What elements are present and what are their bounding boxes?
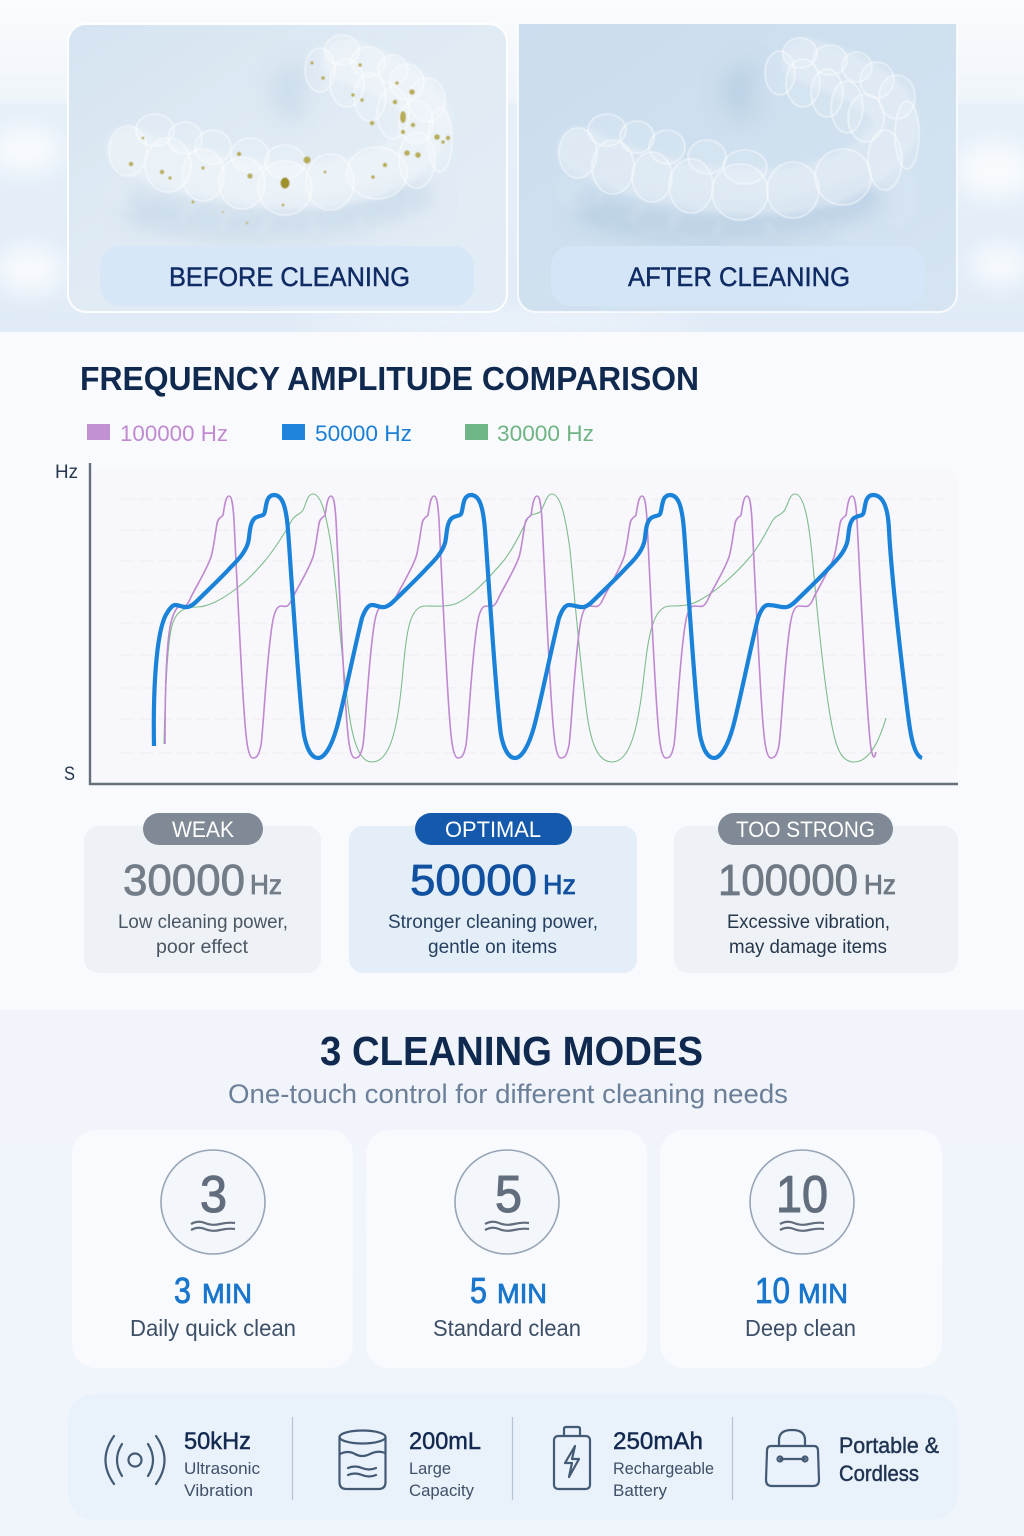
description: optimal: gentle on items [428,937,557,958]
label: 3 min [174,1270,252,1311]
series: 30000 Hz [164,494,886,762]
label: before cleaning: BEFORE CLEANING [169,262,410,292]
spec: 50kHz ultrasonic vibration: Vibration [184,1481,253,1500]
description: standard clean: Standard clean [433,1315,581,1341]
badge: weak [143,813,263,845]
spec: 200mL large capacity: Capacity [409,1481,474,1500]
line chart: frequency waves [55,462,958,785]
icon: 10 timer dial: 10 [776,1166,828,1224]
value: 30000 Hz: 30000 [123,856,245,905]
heading: frequency amplitude comparison: FREQUENCY AMPLITUDE COMPARISON [80,360,699,397]
description: optimal [388,912,598,958]
value: 100000 Hz: Hz [864,869,896,900]
value: 50000 Hz: 50000 [410,856,537,905]
panel: before cleaning photo [68,24,507,312]
spec: portable and cordless [766,1430,939,1486]
value: 100000 Hz: 100000 [718,856,858,905]
value: 50000 Hz: Hz [543,869,576,900]
icon: clean aligner [559,38,919,220]
label: 5 min [470,1270,547,1311]
panel: optimal 50000 Hz [349,813,637,973]
heading: 3 cleaning modes: 3 CLEANING MODES [320,1028,703,1074]
spec: portable and cordless: Portable & [839,1433,939,1458]
label: after cleaning [551,246,925,306]
label: 10 min [755,1270,848,1311]
series: 100000 Hz [165,496,876,758]
spec: 250mAh rechargeable battery: Rechargeable [613,1459,714,1478]
spec: 50kHz ultrasonic vibration: Ultrasonic [184,1459,260,1478]
description: too strong [727,912,890,958]
icon: battery with bolt [554,1427,590,1489]
label: 5 min: 5 [470,1270,487,1311]
spec: 200mL large capacity: 200mL [409,1428,481,1455]
icon: 5 timer dial: 5 [495,1166,522,1224]
axis label: S: S [64,764,75,785]
label: 3 min: 3 [174,1270,191,1311]
icon: clean aligner reflection [596,196,776,236]
icon: water tank [340,1430,386,1489]
description: weak [118,912,288,958]
icon: aligner with debris [109,35,452,224]
value: 30000 Hz: Hz [250,869,282,900]
description: too strong: may damage items [729,937,887,958]
series: 50000 Hz [154,495,922,758]
panel: 3 min mode [72,1130,353,1368]
axis label: Hz: Hz [55,462,78,483]
icon: 10 timer dial [750,1150,854,1254]
spec: 50kHz ultrasonic vibration [106,1428,260,1500]
spec: 50kHz ultrasonic vibration: 50kHz [184,1428,251,1455]
label: after cleaning: AFTER CLEANING [628,262,850,292]
panel: weak 30000 Hz [84,813,321,973]
description: too strong: Excessive vibration, [727,912,890,933]
icon: carrying bag [766,1430,819,1486]
chart legend: 50000 Hz [315,421,412,446]
panel: 5 min mode [366,1130,647,1368]
spec: 250mAh rechargeable battery: 250mAh [613,1428,703,1455]
description: optimal: Stronger cleaning power, [388,912,598,933]
icon: 3 timer dial: 3 [200,1166,227,1224]
label: 5 min: MIN [497,1278,547,1309]
subheading: One-touch control for different cleaning needs [228,1079,788,1109]
icon: 5 timer dial [455,1150,559,1254]
description: deep clean: Deep clean [745,1315,856,1341]
label: 10 min: MIN [798,1278,848,1309]
description: weak: Low cleaning power, [118,912,288,933]
chart legend: 100000 Hz [120,421,228,446]
badge: too strong: TOO STRONG [736,817,875,842]
chart legend [87,421,594,446]
spec: 200mL large capacity [340,1428,481,1500]
description: weak: poor effect [156,937,249,958]
spec: portable and cordless: Cordless [839,1461,919,1486]
label: before cleaning [100,246,474,306]
panel: too strong 100000 Hz [674,813,958,973]
panel: 10 min mode [660,1130,942,1368]
panel: after cleaning photo [518,24,957,312]
panel: product specs bar [68,1394,958,1520]
badge: too strong [718,813,893,845]
label: 3 min: MIN [202,1278,252,1309]
badge: optimal: OPTIMAL [445,817,541,842]
spec: 200mL large capacity: Large [409,1459,451,1478]
description: daily quick clean: Daily quick clean [130,1315,296,1341]
icon: aligner reflection [108,165,445,243]
badge: optimal [415,813,572,845]
label: 10 min: 10 [755,1270,790,1311]
icon: vibration waves [106,1436,164,1484]
spec: 250mAh rechargeable battery: Battery [613,1481,667,1500]
chart legend: 30000 Hz [497,421,594,446]
icon: 3 timer dial [161,1150,265,1254]
badge: weak: WEAK [172,817,234,842]
spec: 250mAh rechargeable battery [554,1427,714,1500]
